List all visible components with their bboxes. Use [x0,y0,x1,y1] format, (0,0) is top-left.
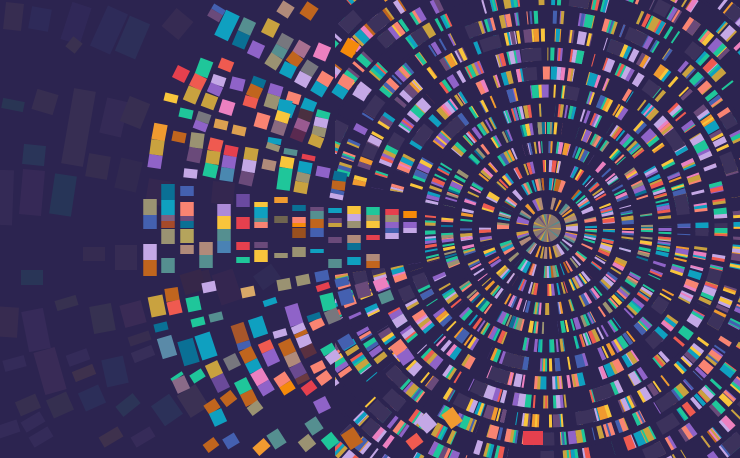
outer rings [335,0,740,458]
bright blocks: lower centre [395,343,543,446]
middle rings [336,17,740,439]
bright blocks: lower left [155,271,388,451]
bright blocks: central left band [150,184,410,276]
bright blocks: upper left [154,4,364,199]
concentric data rings [335,0,740,458]
inner rings [447,128,647,328]
faded outer blocks on the left [3,3,272,442]
central disc [540,221,554,235]
